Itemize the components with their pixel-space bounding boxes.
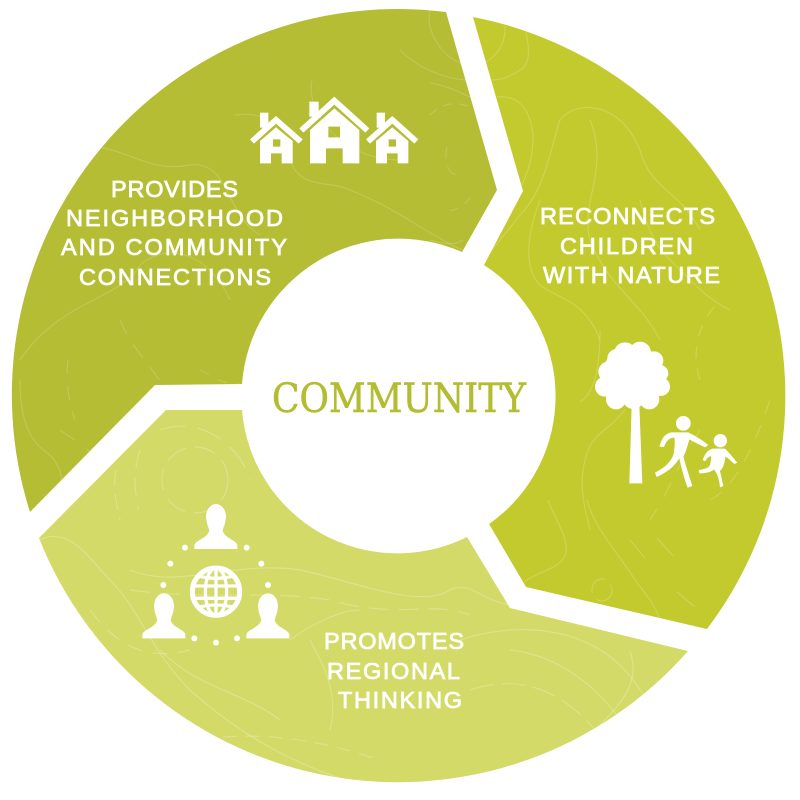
text: provides neighborhood and community connections: AND COMMUNITY xyxy=(61,234,287,260)
title: community: COMMUNITY xyxy=(272,376,527,422)
center circle with title xyxy=(243,243,553,553)
text: promotes regional thinking: PROMOTES xyxy=(324,628,464,654)
text: provides neighborhood and community connections: CONNECTIONS xyxy=(79,264,271,290)
text: provides neighborhood and community connections: PROVIDES xyxy=(111,176,238,202)
icon: running adult and child xyxy=(655,416,737,488)
text: reconnects children with nature: WITH NATURE xyxy=(543,262,720,288)
text: promotes regional thinking: THINKING xyxy=(338,687,462,713)
icon: tree and running adult with child xyxy=(595,342,737,488)
icon: people connected around a globe xyxy=(142,504,289,646)
panel: promotes regional thinking segment xyxy=(39,410,688,790)
text: reconnects children with nature: RECONNECTS xyxy=(540,203,715,229)
text: reconnects children with nature: CHILDREN xyxy=(560,233,693,259)
icon: person top xyxy=(194,504,237,549)
text: promotes regional thinking xyxy=(324,628,464,713)
text: provides neighborhood and community connections: NEIGHBORHOOD xyxy=(66,205,283,231)
text: provides neighborhood and community connections xyxy=(61,176,287,290)
panel: reconnects children with nature segment xyxy=(473,17,785,629)
icon: tree xyxy=(595,342,670,483)
icon: globe xyxy=(192,568,240,615)
panel: neighborhood and community connections segment xyxy=(12,9,497,512)
text: promotes regional thinking: REGIONAL xyxy=(327,658,460,684)
icon: person right xyxy=(246,593,289,638)
text: reconnects children with nature xyxy=(540,203,720,288)
icon: person left xyxy=(142,593,185,638)
icon: three houses xyxy=(250,97,418,163)
